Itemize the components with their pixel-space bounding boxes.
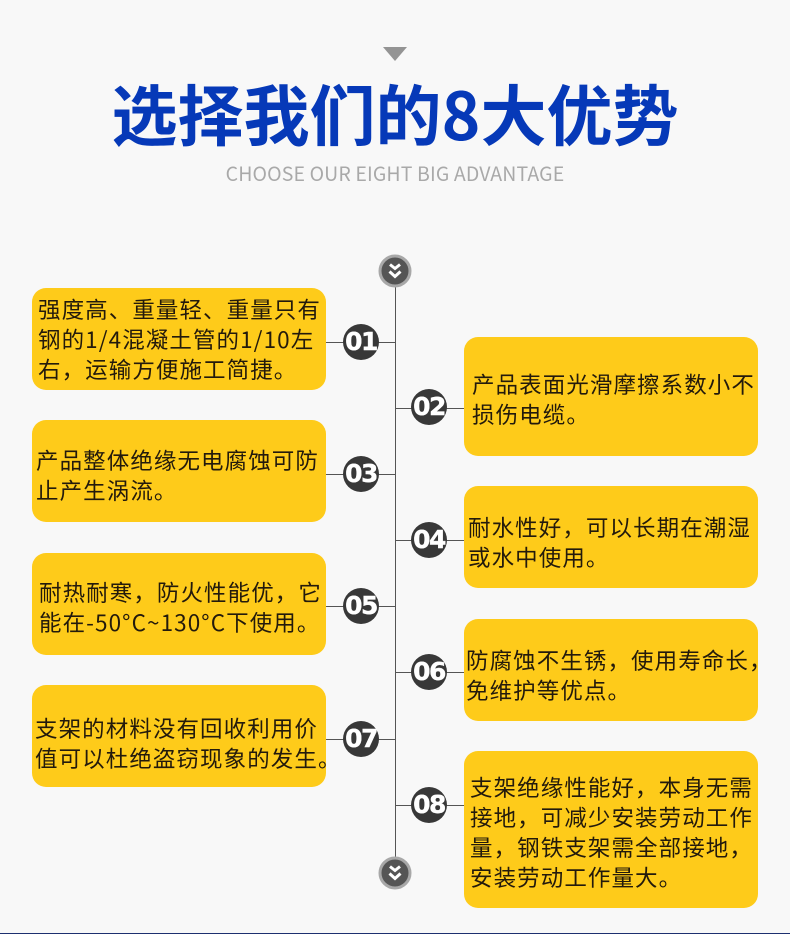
item 04 xyxy=(396,486,758,588)
text 01: 钢的1/4混凝土管的1/10左 xyxy=(38,323,314,355)
icon: top chevron badge xyxy=(378,254,412,288)
text 07: 支架的材料没有回收利用价 xyxy=(35,712,318,744)
number 05: 05 xyxy=(345,591,377,620)
marker triangle xyxy=(383,47,407,61)
text 02 xyxy=(472,368,755,430)
panel 07 xyxy=(32,685,326,787)
text 04: 或水中使用。 xyxy=(468,541,609,573)
item 01 xyxy=(32,288,395,390)
text 06 xyxy=(466,644,773,706)
text 05 xyxy=(39,576,322,638)
number 03: 03 xyxy=(345,459,377,488)
item 06 xyxy=(396,619,773,721)
item 07 xyxy=(32,685,395,787)
icon: bottom chevron badge xyxy=(378,856,412,890)
text 08: 安装劳动工作量大。 xyxy=(470,861,682,893)
text 08: 接地，可减少安装劳动工作 xyxy=(470,801,753,833)
text 01 xyxy=(38,293,321,385)
text 05: 能在-50°C~130°C下使用。 xyxy=(39,606,320,638)
text 03: 产品整体绝缘无电腐蚀可防 xyxy=(36,444,319,476)
number 04: 04 xyxy=(413,525,445,554)
item 08 xyxy=(396,751,758,908)
text 08: 量，钢铁支架需全部接地， xyxy=(470,831,753,863)
text 08 xyxy=(470,771,753,893)
number 08: 08 xyxy=(413,790,445,819)
text 08: 支架绝缘性能好，本身无需 xyxy=(470,771,753,803)
panel 04 xyxy=(464,486,758,588)
text 06: 免维护等优点。 xyxy=(466,674,631,706)
panel 03 xyxy=(32,420,326,522)
number 01: 01 xyxy=(345,327,377,356)
text 06: 防腐蚀不生锈，使用寿命长， xyxy=(466,644,773,676)
panel 02 xyxy=(464,337,758,456)
timeline spine xyxy=(395,285,396,860)
number 02: 02 xyxy=(413,392,445,421)
panel 01 xyxy=(32,288,326,390)
subtitle: CHOOSE OUR EIGHT BIG ADVANTAGE xyxy=(226,158,564,187)
text 01: 右，运输方便施工简捷。 xyxy=(38,353,297,385)
item 03 xyxy=(32,420,395,522)
item 02 xyxy=(396,337,758,456)
number 06: 06 xyxy=(413,657,445,686)
panel 08 xyxy=(464,751,758,908)
text 04 xyxy=(468,511,751,573)
text 07 xyxy=(35,712,342,774)
panel 05 xyxy=(32,553,326,655)
number 07: 07 xyxy=(345,724,377,753)
text 02: 损伤电缆。 xyxy=(472,398,590,430)
item 05 xyxy=(32,553,395,655)
text 03 xyxy=(36,444,319,506)
title: 选择我们的8大优势 xyxy=(112,64,678,160)
text 07: 值可以杜绝盗窃现象的发生。 xyxy=(35,742,342,774)
panel 06 xyxy=(464,619,758,721)
text 01: 强度高、重量轻、重量只有 xyxy=(38,293,321,325)
text 03: 止产生涡流。 xyxy=(36,474,177,506)
text 02: 产品表面光滑摩擦系数小不 xyxy=(472,368,755,400)
text 05: 耐热耐寒，防火性能优，它 xyxy=(39,576,322,608)
text 04: 耐水性好，可以长期在潮湿 xyxy=(468,511,751,543)
